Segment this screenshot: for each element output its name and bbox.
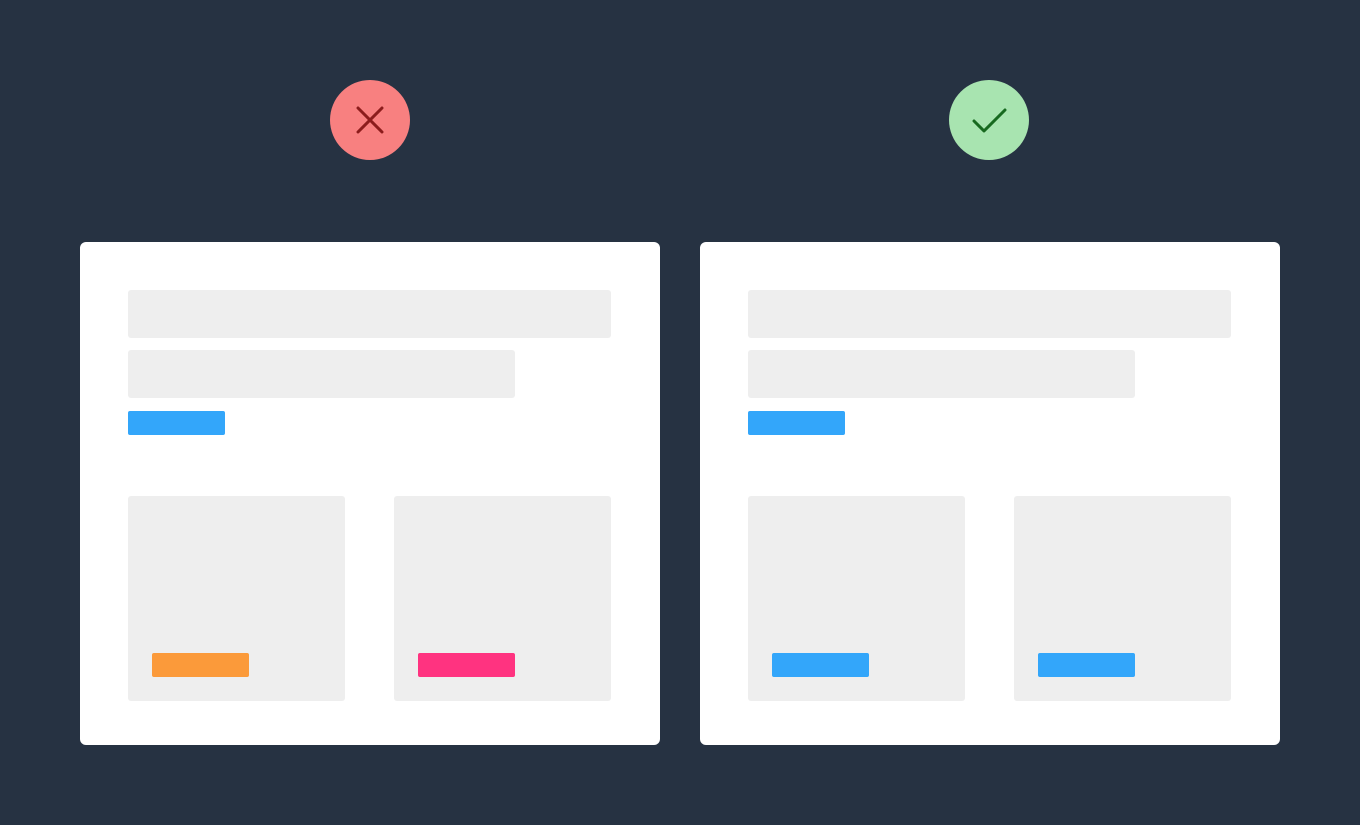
blue button right <box>1038 653 1135 677</box>
blue button left <box>772 653 869 677</box>
sub card left <box>748 496 965 701</box>
panel: right example card <box>700 242 1280 745</box>
title bar placeholder <box>128 290 611 338</box>
subtitle bar placeholder <box>748 350 1135 398</box>
sub card right <box>394 496 611 701</box>
pink button <box>418 653 515 677</box>
orange button <box>152 653 249 677</box>
primary blue button <box>128 411 225 435</box>
title bar placeholder <box>748 290 1231 338</box>
sub card left <box>128 496 345 701</box>
icon: wrong (red cross) <box>330 80 410 160</box>
panel: wrong example card <box>80 242 660 745</box>
icon: right (green check) <box>949 80 1029 160</box>
subtitle bar placeholder <box>128 350 515 398</box>
primary blue button <box>748 411 845 435</box>
sub card right <box>1014 496 1231 701</box>
